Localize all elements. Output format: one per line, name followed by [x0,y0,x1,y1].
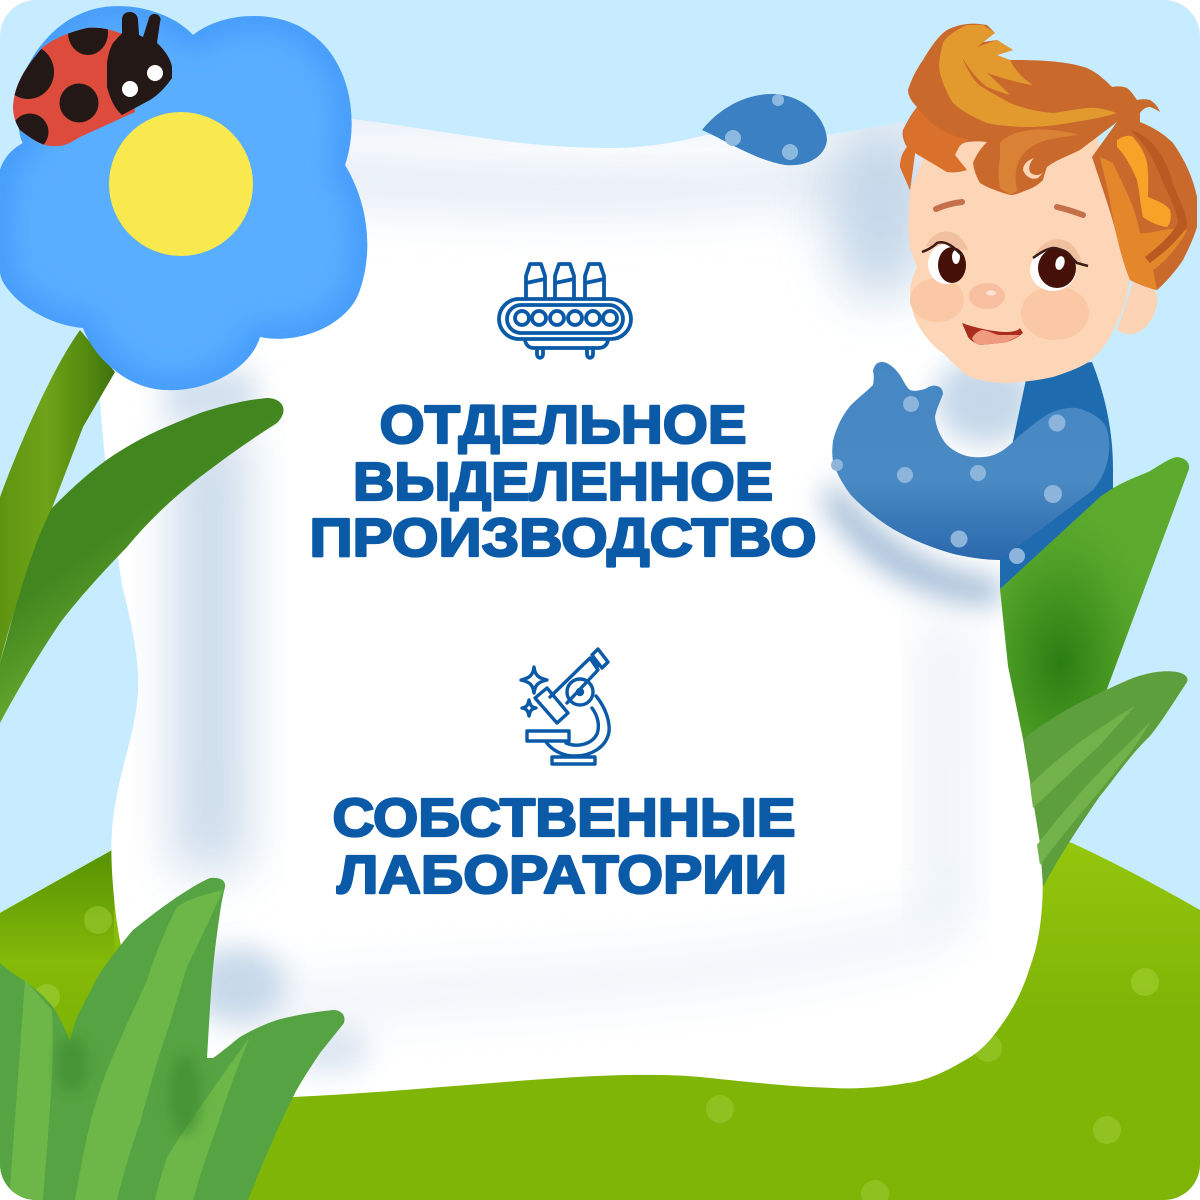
baby arm [831,362,1109,564]
baby body [1000,362,1113,589]
baby head [900,24,1197,383]
heading: own laboratories [334,797,794,895]
grass bottom left [0,878,345,1200]
flower stem and left leaf [0,330,284,723]
drop [702,94,827,165]
heading: dedicated production: ВЫДЕЛЕННОЕ [353,452,773,512]
face [908,120,1130,383]
icon: conveyor with bottles [499,264,631,358]
eyelids [926,231,1082,264]
cheeks [910,278,964,322]
forelock curl [998,129,1080,195]
heading: own laboratories: СОБСТВЕННЫЕ [332,788,796,848]
hair left shade [900,107,970,190]
ear [1117,282,1158,334]
right leaves [1000,457,1189,887]
flower centre [109,112,253,256]
cloth panel [100,119,1043,1097]
green hill [0,832,1200,1200]
hair top streak [939,25,1117,127]
eyebrows [936,202,962,209]
heading: dedicated production: ОТДЕЛЬНОЕ [380,395,746,455]
eyes [928,244,958,284]
curl gap [1023,158,1043,179]
heading: own laboratories: ЛАБОРАТОРИИ [337,845,787,905]
arm shadow [822,480,1000,604]
mouth [962,323,1023,345]
heading: dedicated production [310,395,816,568]
hair base [900,24,1197,290]
hair side highlight [1117,136,1171,227]
icon: microscope [521,649,609,764]
nose [969,283,1005,309]
hair side dark [1130,130,1187,263]
heading: dedicated production: ПРОИЗВОДСТВО [310,508,816,568]
hair side mid [1100,157,1187,290]
flower [0,0,380,400]
ladybug [13,12,172,146]
